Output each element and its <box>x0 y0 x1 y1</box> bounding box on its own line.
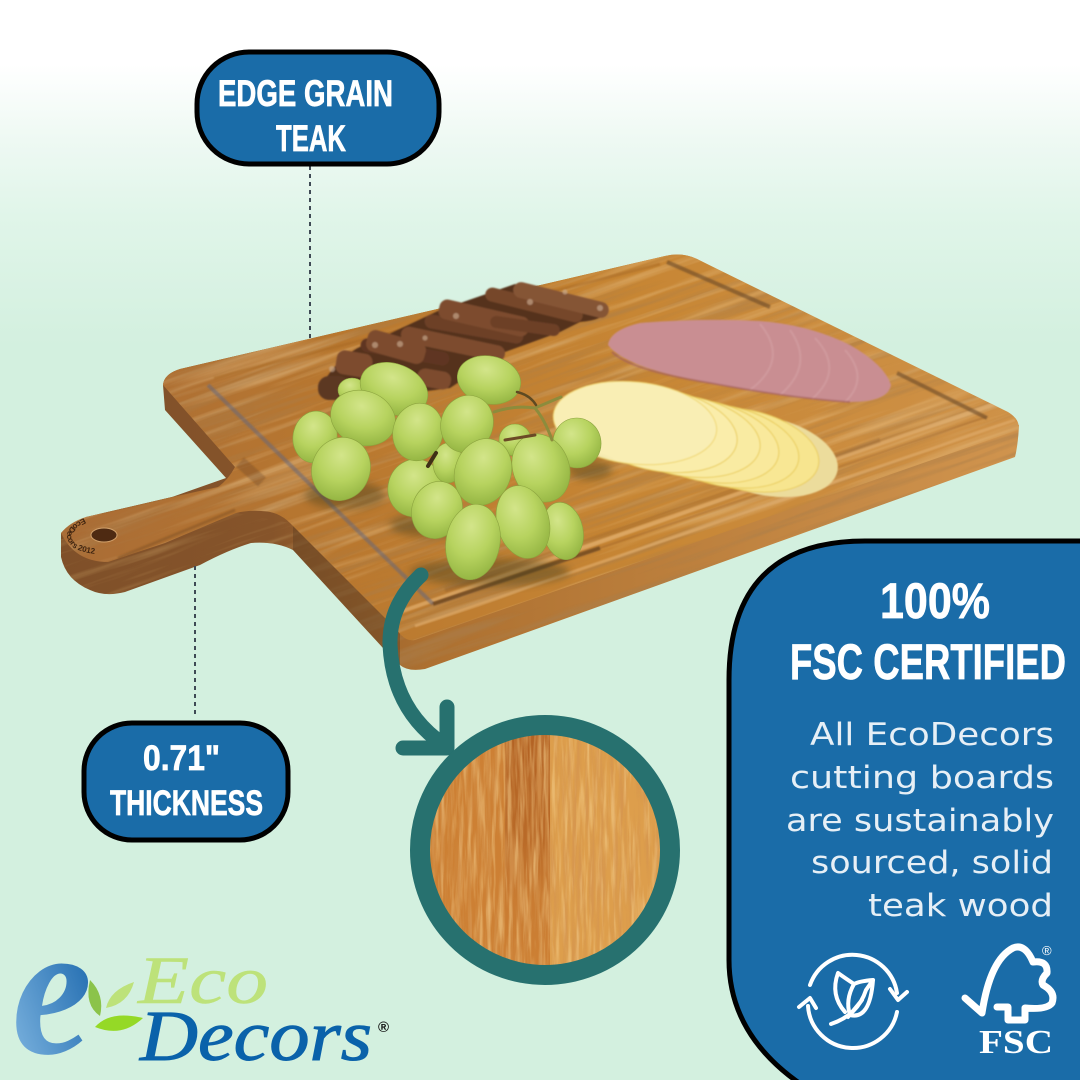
crackers <box>318 280 610 402</box>
cheese slices <box>549 374 845 510</box>
panel body text: All EcoDecors <box>810 717 1054 753</box>
pill: thickness: 0.71" <box>143 739 220 778</box>
wood grain detail circle <box>420 725 675 975</box>
pill: thickness: THICKNESS <box>110 784 263 823</box>
grape bunch <box>289 350 605 584</box>
grape shadows <box>305 460 612 586</box>
icon: recycling leaf <box>799 955 907 1048</box>
handle hole <box>91 528 117 542</box>
icon: FSC tree logo: FSC <box>979 1024 1053 1061</box>
icon: FSC tree logo <box>965 943 1053 1061</box>
panel body text: are sustainably <box>786 803 1054 839</box>
grape stems <box>428 392 561 466</box>
registered mark: ® <box>378 1019 389 1036</box>
board top surface <box>61 255 1019 640</box>
panel: FSC certified <box>729 541 1080 1080</box>
panel body text <box>786 717 1054 924</box>
juice groove <box>208 262 987 604</box>
logo: EcoDecors <box>12 885 389 1080</box>
wood grain <box>68 256 1018 640</box>
panel heading <box>790 573 1066 690</box>
panel body text: teak wood <box>868 888 1053 924</box>
engraved handle text: EcoDecors 2012 <box>67 518 95 554</box>
board side faces <box>61 255 1019 670</box>
pill: edge grain teak <box>197 52 439 164</box>
callout line: edge grain <box>309 166 311 357</box>
panel body text: sourced, solid <box>811 845 1053 881</box>
cutting board with food <box>61 254 1019 670</box>
teal ring <box>420 725 670 975</box>
logo leaves <box>88 980 143 1031</box>
side grain texture <box>61 432 1018 666</box>
salami slices <box>608 320 891 402</box>
pill: edge grain teak: EDGE GRAIN <box>218 73 393 114</box>
pill: edge grain teak: TEAK <box>276 118 346 159</box>
panel body text: cutting boards <box>790 760 1054 796</box>
arrow to wood detail <box>390 575 447 748</box>
logo word Eco: Eco <box>137 942 268 1018</box>
logo word Decors: Decors <box>139 996 372 1076</box>
panel heading: 100% <box>880 573 990 629</box>
callout line: thickness <box>194 566 196 718</box>
pill: thickness <box>84 723 288 840</box>
icon: FSC tree logo: ® <box>1042 943 1052 958</box>
